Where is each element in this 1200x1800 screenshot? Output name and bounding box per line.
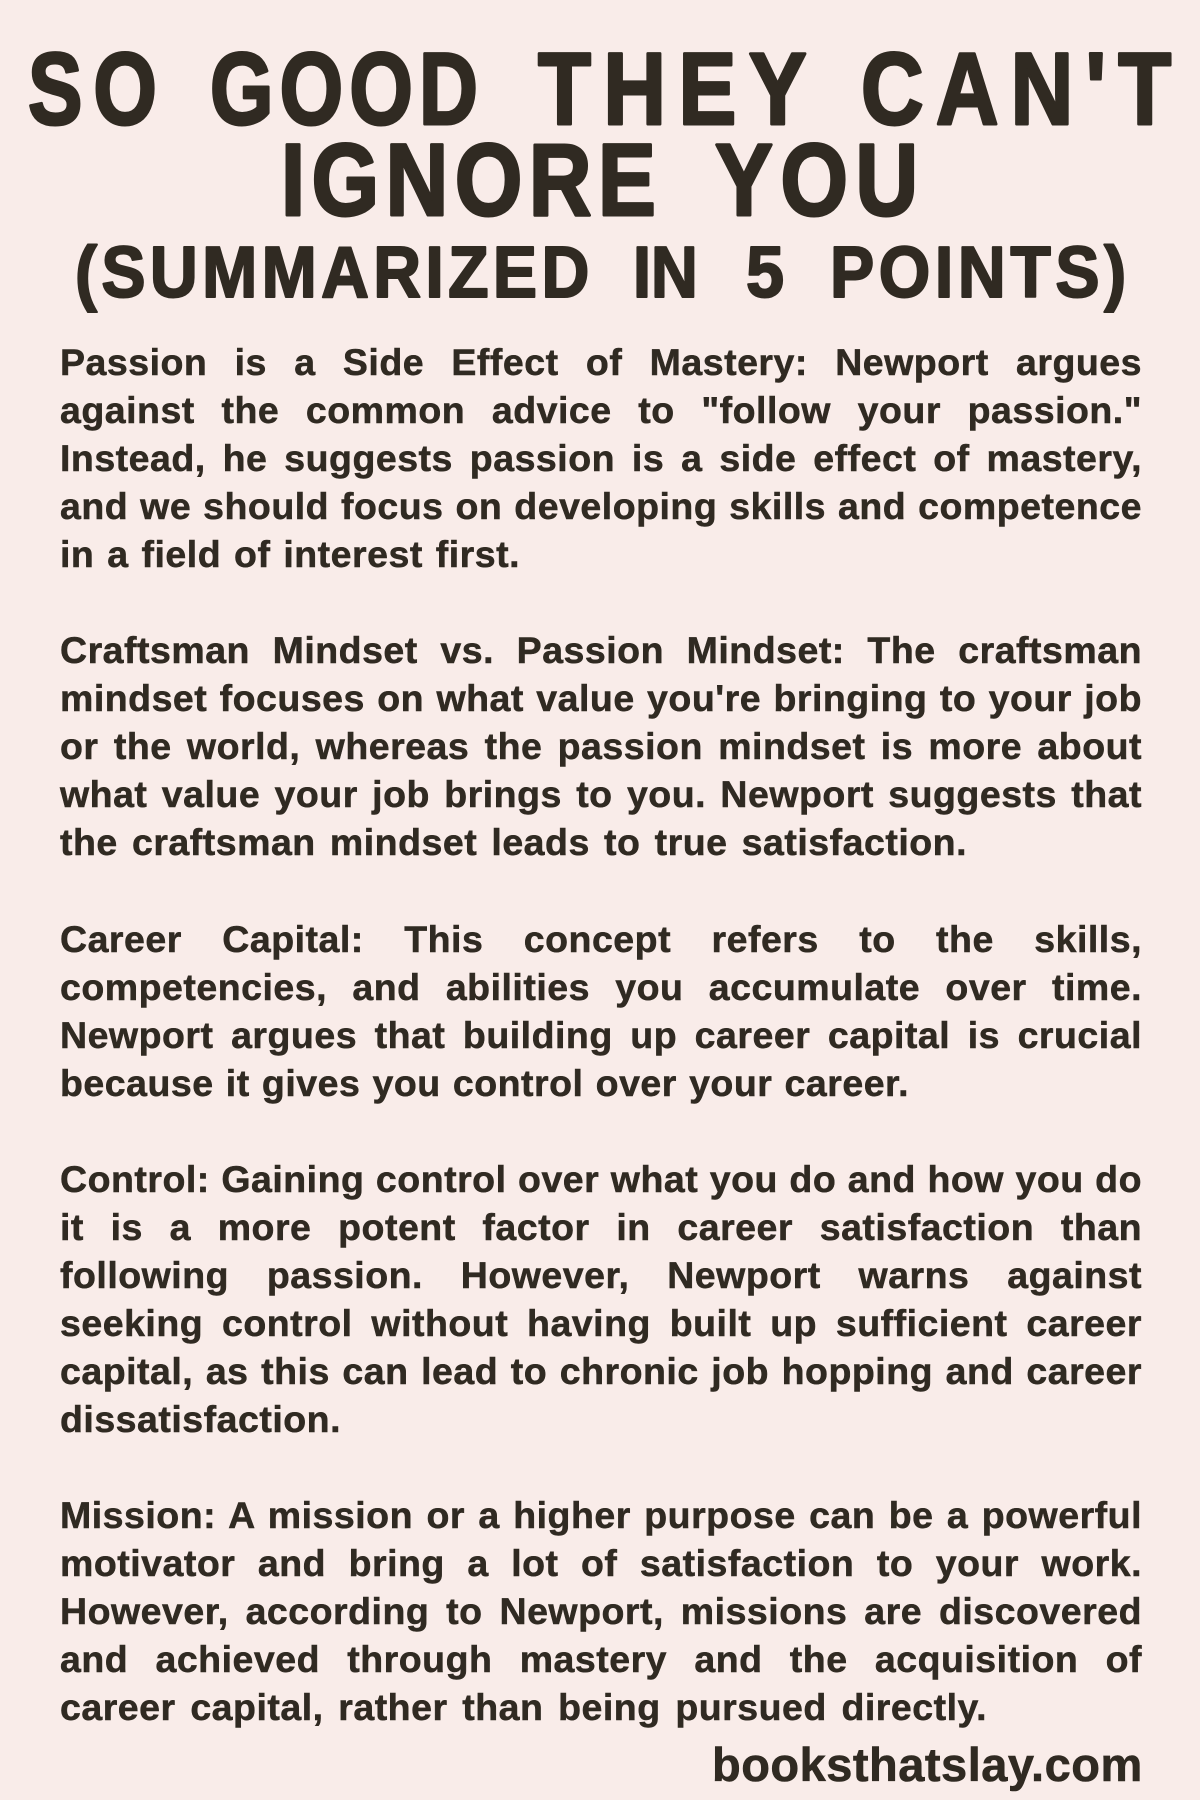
text block: mission: motivator and bring a lot of satisfaction to your work. (60, 1542, 1142, 1584)
text block: career capital: Newport argues that building up career capital is crucial (60, 1014, 1142, 1056)
text block: career capital: Career Capital: This concept refers to the skills, (60, 918, 1142, 960)
heading line 1: THEY (538, 32, 807, 147)
text block: mission: However, according to Newport, missions are discovered (60, 1590, 1142, 1632)
text block: craftsman mindset vs passion mindset: the craftsman mindset leads to true satisfaction. (60, 821, 967, 863)
text block: career capital (60, 918, 1142, 1104)
subtitle (75, 231, 1126, 313)
text block: craftsman mindset vs passion mindset (60, 629, 1142, 863)
text block: passion is a side effect of mastery: in a field of interest first. (60, 533, 520, 575)
text block: mission: career capital, rather than being pursued directly. (60, 1686, 987, 1728)
subtitle: 5 (746, 231, 784, 312)
title (28, 31, 1172, 313)
subtitle: (SUMMARIZED (75, 231, 589, 313)
text block: passion is a side effect of mastery: Instead, he suggests passion is a side effect of mastery, (60, 437, 1142, 479)
text block: control: capital, as this can lead to chronic job hopping and career (60, 1350, 1142, 1392)
text block: craftsman mindset vs passion mindset: what value your job brings to you. Newport suggests that (60, 773, 1142, 815)
subtitle: IN (633, 232, 698, 313)
heading line 1: GOOD (210, 31, 478, 146)
heading line 2 (281, 123, 918, 238)
text block: control: it is a more potent factor in career satisfaction than (60, 1206, 1142, 1248)
heading line 1 (28, 31, 1171, 147)
heading line 2: YOU (715, 123, 918, 238)
text block: control: following passion. However, Newport warns against (60, 1254, 1142, 1296)
text block: control: dissatisfaction. (60, 1398, 341, 1440)
text block: passion is a side effect of mastery (60, 341, 1142, 575)
text block: passion is a side effect of mastery: and we should focus on developing skills and competence (60, 485, 1142, 527)
text block: craftsman mindset vs passion mindset: or the world, whereas the passion mindset is more about (60, 725, 1142, 767)
subtitle: POINTS) (830, 231, 1126, 313)
footer: website: booksthatslay.com (712, 1738, 1143, 1791)
text block: passion is a side effect of mastery: Passion is a Side Effect of Mastery: Newport argues (60, 341, 1142, 383)
text block: career capital: competencies, and abilities you accumulate over time. (60, 966, 1142, 1008)
text block: mission (60, 1494, 1142, 1728)
text block: passion is a side effect of mastery: against the common advice to "follow your passion." (60, 389, 1142, 431)
text block: career capital: because it gives you control over your career. (60, 1062, 909, 1104)
heading line 2: IGNORE (281, 123, 656, 238)
text block: mission: Mission: A mission or a higher purpose can be a powerful (60, 1494, 1142, 1536)
text block: craftsman mindset vs passion mindset: mindset focuses on what value you're bringing to your job (60, 677, 1142, 719)
heading line 1: CAN'T (861, 32, 1171, 147)
text block: control: seeking control without having built up sufficient career (60, 1302, 1142, 1344)
text block: mission: and achieved through mastery and the acquisition of (60, 1638, 1142, 1680)
heading line 1: SO (28, 31, 157, 146)
text block: control (60, 1158, 1142, 1440)
text block: control: Control: Gaining control over what you do and how you do (60, 1158, 1142, 1200)
text block: craftsman mindset vs passion mindset: Craftsman Mindset vs. Passion Mindset: The craftsman (60, 629, 1142, 671)
